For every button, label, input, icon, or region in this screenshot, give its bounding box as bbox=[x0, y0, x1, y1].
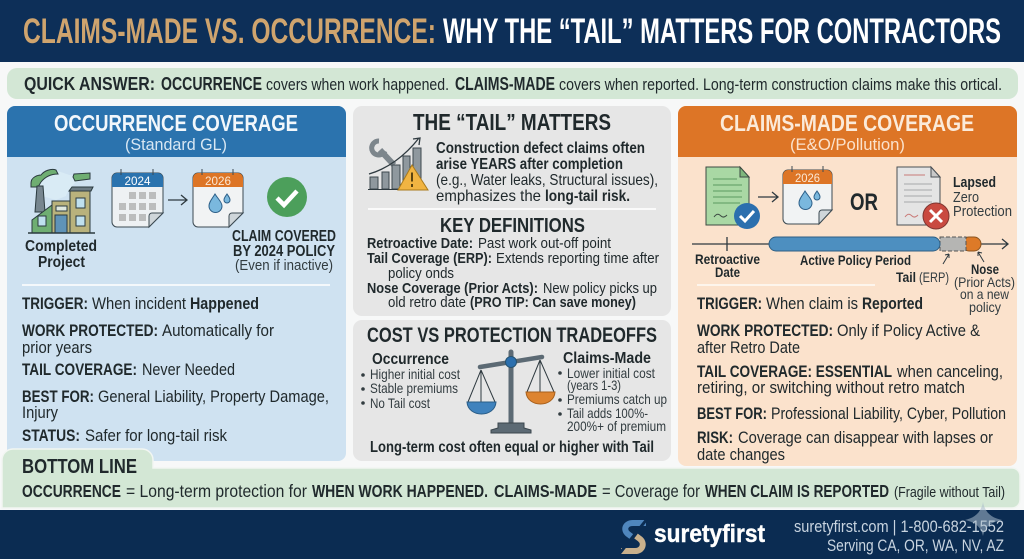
completed project label bbox=[25, 238, 97, 271]
occurrence details list: WORK PROTECTED: bbox=[22, 322, 158, 340]
occurrence column bbox=[361, 351, 460, 411]
arrow: policy to 2026 bbox=[758, 192, 778, 202]
key definitions list: Retroactive Date: bbox=[367, 235, 473, 252]
quick answer bar: CLAIMS-MADE bbox=[455, 74, 555, 94]
bottom line summary: = Long-term protection for bbox=[126, 481, 307, 501]
key definitions list: Past work out-off point bbox=[478, 235, 612, 252]
icon: green check circle bbox=[267, 177, 307, 217]
occurrence details list: Happened bbox=[190, 295, 259, 313]
key definitions list bbox=[367, 235, 659, 311]
occurrence details list: General Liability, Property Damage, bbox=[98, 388, 329, 406]
completed project label: Completed bbox=[25, 238, 97, 255]
lapsed caption: Lapsed bbox=[953, 174, 996, 191]
occurrence column: Higher initial cost bbox=[370, 366, 460, 382]
tail heading: THE “TAIL” MATTERS bbox=[413, 109, 611, 135]
timeline labels bbox=[695, 251, 1015, 315]
icon: wrench, rising chart and warning triangle bbox=[368, 138, 428, 190]
claims-made details list: TRIGGER: bbox=[697, 295, 762, 313]
timeline: policy periods bbox=[692, 237, 1008, 251]
occurrence details list: prior years bbox=[22, 339, 92, 357]
icon: completed project building bbox=[28, 169, 95, 233]
panel: cost vs protection tradeoffs bbox=[353, 320, 671, 461]
occurrence heading: (Standard GL) bbox=[125, 136, 227, 154]
claims-made column bbox=[558, 350, 667, 434]
occurrence details list: TRIGGER: bbox=[22, 295, 88, 313]
footer bar bbox=[0, 510, 1024, 559]
tradeoffs conclusion: Long-term cost often equal or higher with Tail bbox=[370, 439, 654, 456]
tradeoffs heading: COST VS PROTECTION TRADEOFFS bbox=[367, 324, 657, 347]
key definitions list: Tail Coverage (ERP): bbox=[367, 250, 492, 267]
key definitions list: (PRO TIP: Can save money) bbox=[470, 294, 636, 311]
completed project label: Project bbox=[38, 254, 86, 271]
claim covered caption bbox=[232, 228, 336, 274]
claim covered caption: CLAIM COVERED bbox=[232, 228, 336, 245]
tail explanation text: (e.g., Water leaks, Structural issues), bbox=[436, 172, 658, 189]
icon: 2024 calendar: 2024 bbox=[124, 174, 151, 188]
bottom line summary: (Fragile without Tail) bbox=[894, 485, 1005, 501]
icon: balance scale bbox=[467, 352, 555, 433]
quick answer bar: covers when work happened. bbox=[266, 76, 449, 94]
tail explanation text: arise YEARS after completion bbox=[436, 156, 623, 173]
tail explanation text: long-tail risk. bbox=[545, 188, 630, 205]
bottom line summary: CLAIMS-MADE bbox=[494, 481, 597, 501]
icon: 2026 calendar bbox=[783, 166, 832, 224]
header banner with title: CLAIMS-MADE VS. OCCURRENCE: bbox=[23, 12, 436, 51]
bottom line summary: OCCURRENCE bbox=[22, 481, 121, 501]
quick answer bar: OCCURRENCE bbox=[161, 74, 262, 94]
icon: 2026 calendar with water drop: 2026 bbox=[205, 174, 231, 188]
claims-made details list: date changes bbox=[697, 446, 785, 464]
claims-made details list: RISK: bbox=[697, 429, 733, 447]
occurrence column: No Tail cost bbox=[370, 395, 430, 411]
tail explanation text: emphasizes the bbox=[436, 188, 541, 205]
claims-made column: Premiums catch up bbox=[567, 391, 667, 407]
claims-made details list: BEST FOR: bbox=[697, 405, 767, 423]
timeline labels: (ERP) bbox=[919, 269, 949, 285]
claims-made heading: CLAIMS-MADE COVERAGE bbox=[720, 110, 974, 136]
bottom line summary: WHEN CLAIM IS REPORTED bbox=[705, 481, 889, 501]
icon: lapsed document with red x bbox=[897, 167, 949, 229]
occurrence details list: Automatically for bbox=[162, 322, 274, 340]
occurrence column: Occurrence bbox=[372, 351, 449, 368]
occurrence details list: Injury bbox=[22, 404, 59, 422]
bottom line summary: = Coverage for bbox=[602, 481, 700, 501]
icon: 2026 calendar: 2026 bbox=[795, 171, 820, 185]
claims-made details list: Only if Policy Active & bbox=[837, 322, 980, 340]
lapsed caption bbox=[953, 174, 1012, 220]
arrow: 2024 to 2026 bbox=[168, 195, 187, 205]
claims-made heading: (E&O/Pollution) bbox=[790, 136, 905, 154]
quick answer bar: QUICK ANSWER: bbox=[24, 74, 155, 94]
occurrence column: Stable premiums bbox=[370, 380, 458, 396]
occurrence details list: BEST FOR: bbox=[22, 388, 94, 406]
claims-made details list: when canceling, bbox=[896, 363, 1003, 381]
claims-made column: (years 1-3) bbox=[567, 377, 621, 393]
bottom line heading: BOTTOM LINE bbox=[22, 455, 137, 478]
quick answer bar bbox=[7, 68, 1018, 99]
claim covered caption: BY 2024 POLICY bbox=[233, 243, 336, 260]
occurrence heading bbox=[54, 110, 298, 154]
key definitions list: New policy picks up bbox=[543, 280, 657, 297]
key definitions list: Nose Coverage (Prior Acts): bbox=[367, 280, 538, 297]
bottom line summary: WHEN WORK HAPPENED. bbox=[312, 481, 488, 501]
occurrence details list: STATUS: bbox=[22, 427, 80, 445]
timeline labels: Nose bbox=[971, 261, 999, 277]
timeline labels: Retroactive bbox=[695, 251, 760, 267]
icon: 2024 calendar bbox=[112, 169, 163, 227]
logo wordmark: suretyfirst bbox=[654, 520, 766, 548]
icon: 2026 calendar with water drop bbox=[193, 169, 243, 227]
tail explanation text: Construction defect claims often bbox=[436, 140, 645, 157]
claims-made details list: WORK PROTECTED: bbox=[697, 322, 833, 340]
key definitions heading: KEY DEFINITIONS bbox=[440, 214, 585, 237]
key definitions list: Extends reporting time after bbox=[496, 250, 659, 267]
claims-made column: 200%+ of premium bbox=[567, 418, 666, 434]
occurrence details list bbox=[22, 295, 329, 445]
occurrence details list: Safer for long-tail risk bbox=[85, 427, 228, 445]
occurrence details list: Never Needed bbox=[142, 361, 235, 379]
timeline labels: policy bbox=[969, 299, 1001, 315]
claims-made details list: When claim is bbox=[766, 295, 858, 313]
occurrence details list: TAIL COVERAGE: bbox=[22, 361, 137, 379]
or label: OR bbox=[850, 189, 878, 216]
claim covered caption: (Even if inactive) bbox=[235, 257, 333, 274]
lapsed caption: Protection bbox=[953, 203, 1012, 220]
timeline labels: (Prior Acts) bbox=[954, 274, 1015, 290]
icon: green policy document with check bbox=[706, 167, 760, 229]
claims-made column: Tail adds 100%- bbox=[567, 405, 648, 421]
claims-made details list: TAIL COVERAGE: ESSENTIAL bbox=[697, 363, 892, 381]
occurrence details list: When incident bbox=[92, 295, 186, 313]
claims-made details list: Coverage can disappear with lapses or bbox=[738, 429, 993, 447]
timeline labels: Tail bbox=[896, 269, 916, 285]
icon: suretyfirst logo bbox=[620, 519, 647, 553]
panel: the tail matters and key definitions bbox=[353, 106, 671, 316]
panel: claims-made coverage bbox=[678, 106, 1017, 466]
claims-made details list: Reported bbox=[862, 295, 923, 313]
bottom line summary bbox=[22, 481, 1005, 501]
tail explanation text bbox=[436, 140, 658, 205]
key definitions list: old retro date bbox=[388, 294, 466, 311]
panel: occurrence coverage bbox=[7, 106, 346, 461]
claims-made details list: retiring, or switching without retro match bbox=[697, 379, 965, 397]
timeline labels: on a new bbox=[960, 286, 1010, 302]
contact details bbox=[794, 518, 1004, 555]
claims-made column: Lower initial cost bbox=[567, 365, 655, 381]
header banner with title bbox=[0, 0, 1024, 62]
timeline labels: Date bbox=[715, 264, 740, 280]
occurrence heading: OCCURRENCE COVERAGE bbox=[54, 110, 298, 136]
panel: bottom line bbox=[2, 449, 1020, 508]
claims-made column: Claims-Made bbox=[563, 350, 651, 367]
claims-made details list bbox=[697, 295, 1006, 464]
key definitions list: policy onds bbox=[388, 265, 454, 282]
claims-made heading bbox=[720, 110, 974, 154]
timeline labels: Active Policy Period bbox=[800, 252, 911, 268]
icon: sparkle watermark bbox=[965, 502, 1002, 536]
lapsed caption: Zero bbox=[953, 189, 979, 206]
claims-made details list: after Retro Date bbox=[697, 339, 800, 357]
